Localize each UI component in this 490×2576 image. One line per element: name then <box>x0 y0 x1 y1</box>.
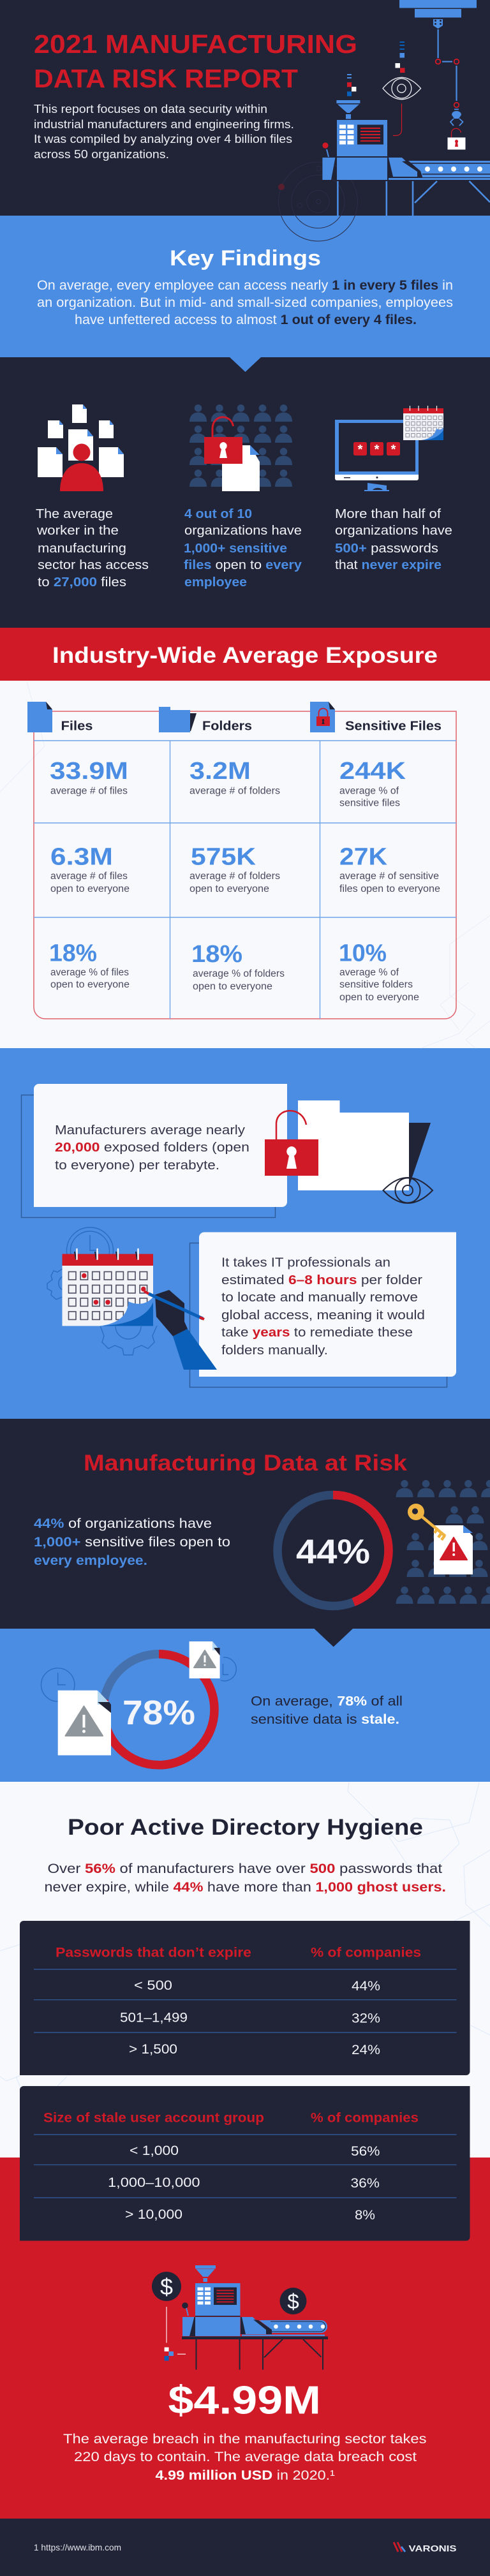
stat: sensitive files row 1: sensitive files <box>339 797 400 809</box>
icon: monitor with passwords and calendar: * <box>391 443 396 457</box>
key finding 3 text <box>335 507 452 572</box>
stat: folders row 3: open to everyone <box>193 981 272 992</box>
key finding 1 text <box>36 507 149 589</box>
stat: files row 3: open to everyone <box>50 979 130 990</box>
stat: files row 2: average # of files <box>50 871 128 882</box>
stat: folders row 2: open to everyone <box>189 884 269 894</box>
illustration: machine producing dollars <box>152 2265 328 2369</box>
column headings: Sensitive Files <box>345 720 442 734</box>
text: hygiene summary: never expire, while 44% have more than 1,000 ghost users. <box>45 1880 446 1895</box>
callout: exposed folders card: Manufacturers average nearly <box>55 1123 245 1137</box>
stat: files row 3: average % of files <box>50 967 129 978</box>
stat: sensitive files row 3: average % of <box>339 967 399 978</box>
stat: sensitive files row 2: files open to everyone <box>339 884 440 894</box>
stat: folders row 3 <box>191 941 285 992</box>
callout: remediation time card <box>190 1232 456 1387</box>
table: size of stale user account group: < 1,000 <box>130 2143 179 2158</box>
icon: monitor with passwords and calendar: * <box>375 443 380 457</box>
text: hygiene summary <box>45 1862 446 1895</box>
table: size of stale user account group: 36% <box>351 2176 380 2191</box>
table: size of stale user account group: 56% <box>351 2144 380 2159</box>
stat: files row 2 <box>50 843 130 894</box>
heading: industry-wide average exposure: Industry-Wide Average Exposure <box>52 643 438 668</box>
footnote: 1 https://www.ibm.com <box>34 2542 121 2552</box>
key finding 3 text: More than half of <box>335 507 441 521</box>
key finding 1 text: worker in the <box>36 524 119 538</box>
icon: monitor with passwords and calendar: * <box>358 443 363 457</box>
column headings: Files <box>61 720 93 734</box>
column headings <box>61 720 442 734</box>
logo: varonis <box>394 2542 457 2553</box>
icon: stale alert files and clocks <box>41 1641 236 1756</box>
key finding 3 text: that never expire <box>335 558 442 572</box>
table: passwords that don't expire: < 500 <box>134 1978 172 1993</box>
key finding 3 text: organizations have <box>335 524 452 538</box>
text: 44 percent of organizations: 44% of organizations have <box>34 1516 212 1531</box>
stat: sensitive files row 3: sensitive folders <box>339 979 413 990</box>
stat: files row 3: 18% <box>49 940 97 967</box>
stat: files row 3 <box>49 940 130 990</box>
key finding 2 text: employee <box>184 575 247 589</box>
table: size of stale user account group <box>20 2086 470 2240</box>
title: DATA RISK REPORT <box>34 64 298 93</box>
intro text: It was compiled by analyzing over 4 billion files <box>34 133 292 145</box>
donut chart: 44 percent: 44% <box>296 1533 370 1571</box>
illustration: machine producing dollars: $ <box>160 2274 173 2300</box>
key findings text: On average, every employee can access nearly 1 in every 5 files in <box>37 278 453 293</box>
key findings text: an organization. But in mid- and small-sized companies, employees <box>37 295 453 310</box>
title: 2021 MANUFACTURING <box>34 29 357 59</box>
table: passwords that don't expire: 501–1,499 <box>120 2011 188 2025</box>
donut chart: 44 percent <box>278 1495 389 1606</box>
text: 44 percent of organizations <box>34 1516 230 1568</box>
callout: remediation time card: take years to remediate these <box>221 1326 413 1340</box>
stat: folders row 1: average # of folders <box>189 786 280 796</box>
intro text <box>34 103 294 161</box>
stat: files row 1 <box>50 758 128 796</box>
icon: file <box>27 702 52 732</box>
stat: sensitive files row 3: 10% <box>339 940 387 967</box>
table: passwords that don't expire: 32% <box>352 2011 380 2026</box>
stat: folders row 3: average % of folders <box>193 968 285 979</box>
stat: folders row 2: average # of folders <box>189 871 280 882</box>
stat: folders row 2 <box>189 843 280 894</box>
key finding 2 text: files open to every <box>184 558 302 572</box>
table: size of stale user account group: % of companies <box>311 2110 419 2126</box>
big number: breach cost: $4.99M <box>168 2379 321 2423</box>
callout: exposed folders card: 20,000 exposed folders (open <box>55 1141 249 1155</box>
key finding 1 text: The average <box>36 507 113 521</box>
text: 78 percent stale: sensitive data is stale. <box>251 1712 399 1727</box>
intro text: This report focuses on data security within <box>34 103 267 115</box>
table: passwords that don't expire: > 1,500 <box>129 2042 177 2057</box>
icon: key, alert file and employees <box>396 1480 490 1604</box>
text: 78 percent stale: On average, 78% of all <box>251 1694 403 1708</box>
table: passwords that don't expire: % of companies <box>311 1946 421 1960</box>
logo: varonis: VARONIS <box>408 2543 457 2553</box>
intro text: industrial manufacturers and engineering firms. <box>34 118 294 131</box>
table: size of stale user account group: Size of stale user account group <box>43 2110 264 2126</box>
key finding 2 text: organizations have <box>184 524 302 538</box>
key findings text: have unfettered access to almost 1 out of every 4 files. <box>75 313 417 327</box>
text: 44 percent of organizations: 1,000+ sensitive files open to <box>34 1535 230 1550</box>
icon: open lock, file and employees <box>189 404 292 491</box>
header illustration: manufacturing machine <box>278 0 490 241</box>
stat: folders row 1 <box>189 758 280 796</box>
heading: poor active directory hygiene: Poor Active Directory Hygiene <box>68 1815 423 1840</box>
arrow pointer <box>314 1629 353 1647</box>
callout: remediation time card: It takes IT professionals an <box>221 1255 390 1269</box>
text: breach cost explanation: The average breach in the manufacturing sector takes <box>63 2432 426 2446</box>
stat: files row 1: average # of files <box>50 786 128 796</box>
callout: remediation time card: folders manually. <box>221 1344 328 1358</box>
icon: sensitive file <box>310 702 335 732</box>
stat: sensitive files row 2: average # of sensitive <box>339 871 439 882</box>
callout: remediation time card: to locate and manually remove <box>221 1291 418 1305</box>
intro text: across 50 organizations. <box>34 148 169 161</box>
key finding 3 text: 500+ passwords <box>335 542 438 556</box>
icon: folder with lock and eye <box>265 1100 433 1203</box>
key finding 1 text: to 27,000 files <box>38 575 126 589</box>
text: breach cost explanation: 220 days to contain. The average data breach cost <box>74 2450 417 2464</box>
stat: sensitive files row 1: average % of <box>339 786 399 796</box>
exposure table <box>27 702 456 1019</box>
stat: folders row 1: 3.2M <box>189 758 251 785</box>
table: size of stale user account group: 1,000–10,000 <box>108 2175 200 2190</box>
stat: folders row 3: 18% <box>191 941 242 968</box>
stat: files row 2: open to everyone <box>50 884 130 894</box>
stat: sensitive files row 3: open to everyone <box>339 992 419 1003</box>
stat: sensitive files row 1: 244K <box>339 758 406 785</box>
icon: monitor with passwords and calendar <box>335 406 443 491</box>
key finding 2 text: 4 out of 10 <box>184 507 252 521</box>
table: passwords that don't expire <box>20 1921 470 2075</box>
text: breach cost explanation <box>63 2432 426 2483</box>
callout: exposed folders card: to everyone) per terabyte. <box>55 1158 219 1173</box>
title <box>34 29 357 93</box>
key finding 2 text: 1,000+ sensitive <box>184 542 287 556</box>
text: hygiene summary: Over 56% of manufacturers have over 500 passwords that <box>47 1862 442 1876</box>
icon: calendar, clock, gears and hand with pencil <box>47 1227 217 1370</box>
key finding 1 text: manufacturing <box>38 542 126 556</box>
stat: sensitive files row 3 <box>339 940 419 1003</box>
callout: remediation time card: global access, meaning it would <box>221 1308 425 1322</box>
key finding 2 text <box>184 507 302 589</box>
table: passwords that don't expire: Passwords that don’t expire <box>56 1946 251 1960</box>
icon: worker surrounded by files <box>38 404 124 491</box>
key finding 1 text: sector has access <box>38 558 149 572</box>
icon: folder <box>159 707 197 732</box>
column headings: Folders <box>202 720 252 734</box>
stat: folders row 2: 575K <box>191 843 256 870</box>
table: passwords that don't expire: 44% <box>352 1979 380 1994</box>
donut chart: 78 percent <box>103 1654 214 1765</box>
stat: sensitive files row 2 <box>339 843 440 894</box>
key findings text <box>37 278 453 327</box>
table: passwords that don't expire: 24% <box>352 2043 380 2057</box>
illustration: machine producing dollars: $ <box>287 2290 299 2313</box>
heading: key findings: Key Findings <box>170 246 321 270</box>
text: 44 percent of organizations: every employee. <box>34 1553 147 1568</box>
callout: exposed folders card <box>22 1084 287 1217</box>
stat: files row 2: 6.3M <box>50 843 113 870</box>
table: size of stale user account group: 8% <box>355 2208 375 2223</box>
table: size of stale user account group: > 10,000 <box>125 2207 182 2222</box>
text: 78 percent stale <box>251 1694 403 1727</box>
stat: files row 1: 33.9M <box>50 758 128 785</box>
stat: sensitive files row 2: 27K <box>339 843 388 870</box>
heading: manufacturing data at risk: Manufacturing Data at Risk <box>84 1451 408 1476</box>
callout: remediation time card: estimated 6–8 hours per folder <box>221 1273 422 1287</box>
donut chart: 78 percent: 78% <box>122 1694 195 1732</box>
text: breach cost explanation: 4.99 million USD in 2020.¹ <box>156 2468 335 2483</box>
stat: sensitive files row 1 <box>339 758 406 809</box>
arrow pointer <box>230 357 261 372</box>
